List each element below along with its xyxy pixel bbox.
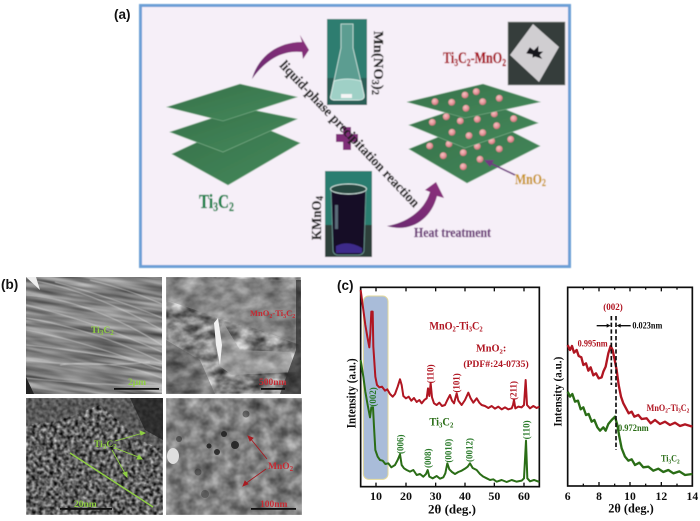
highlight band — [363, 296, 388, 479]
label: Ti3C2-MnO2: Ti — [443, 50, 458, 67]
label: MnO2-Ti3C2: 2 — [665, 408, 668, 415]
arrow: to Mn(NO3)2 — [252, 35, 309, 79]
note: MnO2 PDF card: : — [503, 343, 506, 354]
title: MnO2-Ti3C2: MnO — [429, 320, 455, 332]
curve: Ti3C2 — [361, 360, 539, 482]
peak labels: Ti3C2 — [368, 387, 531, 468]
axis labels: 6 — [565, 490, 571, 503]
annotation: MnO2 arrows — [243, 436, 267, 486]
axis labels: 14 — [687, 490, 698, 503]
peak labels: Ti3C2: (002) — [368, 387, 378, 407]
label: Ti3C2: C — [671, 454, 677, 465]
axis labels: 10 — [624, 490, 636, 503]
panel: microscopy images — [26, 277, 302, 515]
axis labels: 20 — [400, 489, 412, 503]
peak labels: Ti3C2: (0010) — [444, 439, 454, 463]
label: Ti3C2: C — [218, 191, 229, 213]
caption: Ti3C2: Ti — [91, 326, 100, 336]
photo: flask of Mn(NO3)2 — [327, 19, 367, 105]
annotation: 0.023nm: 0.023nm — [632, 321, 663, 331]
image: MnO2 TEM: 2 — [290, 465, 294, 473]
label: Ti3C2: 3 — [668, 458, 671, 465]
axes — [361, 287, 539, 487]
label: KMnO4: 4 — [315, 196, 326, 201]
label: Ti3C2-MnO2: 2 — [467, 58, 471, 69]
title: Ti3C2: 2 — [450, 420, 454, 429]
icon: plus sign — [336, 127, 358, 150]
axis labels — [550, 357, 698, 516]
annotation: 0.023nm — [597, 321, 663, 331]
label: MnO2-Ti3C2: 3 — [678, 408, 681, 415]
image: Ti3C2 TEM: 2 — [113, 443, 117, 451]
peak labels: Ti3C2: (008) — [423, 449, 433, 468]
title: MnO2-Ti3C2: 2 — [479, 324, 483, 333]
note: MnO2 PDF card: 2 — [500, 348, 504, 355]
peak labels: MnO2-Ti3C2: (101) — [452, 373, 462, 393]
label: Mn(NO3)2: Mn(NO — [370, 31, 385, 78]
caption: Ti3C2: 3 — [100, 329, 104, 337]
axis labels: 30 — [430, 489, 442, 503]
caption: MnO2-Ti3C2: -Ti — [272, 308, 284, 318]
label: Ti3C2-MnO2: C — [458, 50, 467, 67]
caption: MnO2-Ti3C2: 3 — [283, 314, 286, 320]
label: Ti3C2: 2 — [677, 458, 680, 465]
axis labels — [344, 358, 530, 516]
scale bar: 100 nm: 100nm — [260, 500, 288, 510]
label: MnO2-Ti3C2: 2 — [687, 408, 689, 415]
axis labels: 40 — [459, 489, 471, 503]
arrow: heat treatment — [387, 182, 444, 228]
label: Mn(NO3)2: 3 — [369, 80, 380, 85]
panel frame — [140, 6, 570, 266]
label: MnO2-Ti3C2: -Ti — [668, 403, 678, 414]
caption: MnO2-Ti3C2: 2 — [269, 314, 272, 320]
caption: Ti3C2: 2 — [110, 329, 114, 337]
label: Mn(NO3)2: 2 — [369, 90, 380, 95]
image: Ti3C2 TEM: C — [106, 440, 113, 450]
annotation: dashed peak shift — [611, 316, 616, 450]
label (a): (a) — [114, 7, 130, 22]
scale bar: 20 nm: 20nm — [74, 500, 97, 510]
axes — [568, 287, 692, 486]
title: Ti3C2: 3 — [439, 420, 443, 429]
image: MnO2-Ti3C2 SEM — [166, 277, 301, 394]
label: Ti3C2-MnO2: -MnO — [471, 50, 502, 67]
photo: beaker of KMnO4 — [325, 171, 372, 257]
note: MnO2 PDF card: (PDF#:24-0735) — [463, 359, 529, 370]
axis labels: 8 — [596, 490, 602, 503]
label (b): (b) — [1, 277, 18, 292]
label: 0.995nm: 0.995nm — [578, 339, 608, 349]
peak labels: Ti3C2: (110) — [521, 420, 531, 439]
label: MnO2-Ti3C2: C — [681, 403, 687, 414]
annotation: Ti3C2 arrows — [70, 431, 153, 507]
label (c): (c) — [337, 278, 354, 293]
label: MnO2: 2 — [542, 178, 546, 189]
label: Ti3C2: Ti — [661, 454, 670, 465]
label: (002): (002) — [603, 302, 623, 312]
image: MnO2 TEM — [166, 398, 302, 515]
title: MnO2-Ti3C2: 3 — [469, 324, 472, 333]
image: MnO2 TEM: MnO — [268, 462, 290, 472]
panel: synthesis schematic — [140, 6, 570, 266]
label: Ti3C2: 2 — [229, 199, 234, 214]
chart: XRD zoomed 002 peak — [550, 287, 698, 516]
axis labels: 12 — [656, 490, 667, 503]
label: reaction along the diagonal: liquid-phase precipitation reaction — [276, 58, 422, 211]
photo: Ti3C2-MnO2 film — [508, 22, 565, 85]
scale bar: 500 nm: 500nm — [259, 378, 287, 388]
title: MnO2-Ti3C2: -Ti — [456, 320, 469, 332]
label: KMnO4: KMnO — [310, 197, 325, 240]
axis labels: 10 — [370, 489, 382, 503]
caption: Ti3C2: C — [103, 326, 110, 336]
peak labels: MnO2-Ti3C2: (110) — [426, 364, 436, 383]
scale bar: 2 μm: 2μm — [128, 378, 146, 388]
curve: MnO2-Ti3C2 — [361, 290, 539, 409]
peak labels: MnO2-Ti3C2: (211) — [509, 381, 519, 400]
image: Ti3C2 SEM — [26, 277, 162, 394]
note: MnO2 PDF card: MnO — [476, 343, 500, 354]
icon: Ti3C2 stacked sheets — [167, 84, 300, 185]
label: Ti3C2: Ti — [199, 191, 218, 213]
caption: MnO2-Ti3C2: MnO — [250, 308, 269, 318]
image: Ti3C2 TEM — [26, 398, 163, 515]
title: Ti3C2: C — [442, 416, 450, 428]
axis labels: Intensity (a.u.) — [344, 358, 358, 428]
scale bar: 2 μm — [114, 378, 159, 390]
axis labels: Intensity (a.u.) — [550, 357, 564, 427]
title: MnO2-Ti3C2: C — [472, 320, 479, 332]
curve: MnO2-Ti3C2 zoom — [568, 345, 692, 427]
axis labels: 50 — [488, 489, 500, 503]
label: Heat treatment: Heat treatment — [414, 226, 491, 241]
caption: MnO2-Ti3C2: 2 — [292, 314, 295, 320]
title: MnO2-Ti3C2: 2 — [453, 324, 456, 333]
label: Ti3C2-MnO2: 3 — [454, 58, 458, 69]
label: Mn(NO3)2: ) — [370, 85, 385, 90]
arrow: pointer to MnO2 — [484, 160, 515, 175]
peak labels: Ti3C2: (0012) — [465, 438, 475, 462]
chart: XRD wide range — [344, 287, 539, 516]
label: Ti3C2-MnO2: 2 — [502, 58, 506, 69]
label: MnO2: MnO — [515, 172, 548, 188]
axis labels: 60 — [518, 489, 530, 503]
label: Ti3C2: 3 — [213, 199, 218, 214]
image: Ti3C2 TEM: 3 — [103, 443, 107, 451]
image: Ti3C2 TEM: Ti — [94, 440, 103, 450]
axis labels: 2θ (deg.) — [428, 501, 476, 516]
label: MnO2-Ti3C2: MnO — [647, 403, 669, 414]
caption: MnO2-Ti3C2: C — [286, 308, 292, 318]
title: Ti3C2: Ti — [429, 416, 440, 428]
note: MnO2 PDF card — [463, 343, 529, 370]
icon: Ti3C2-MnO2 sheets with particles — [407, 84, 540, 183]
axis labels: 2θ (deg.) — [608, 502, 654, 516]
peak labels: MnO2-Ti3C2 — [426, 364, 519, 400]
curve: Ti3C2 zoom — [568, 392, 692, 475]
label: 0.972nm: 0.972nm — [618, 423, 649, 433]
peak labels: Ti3C2: (006) — [395, 435, 405, 454]
